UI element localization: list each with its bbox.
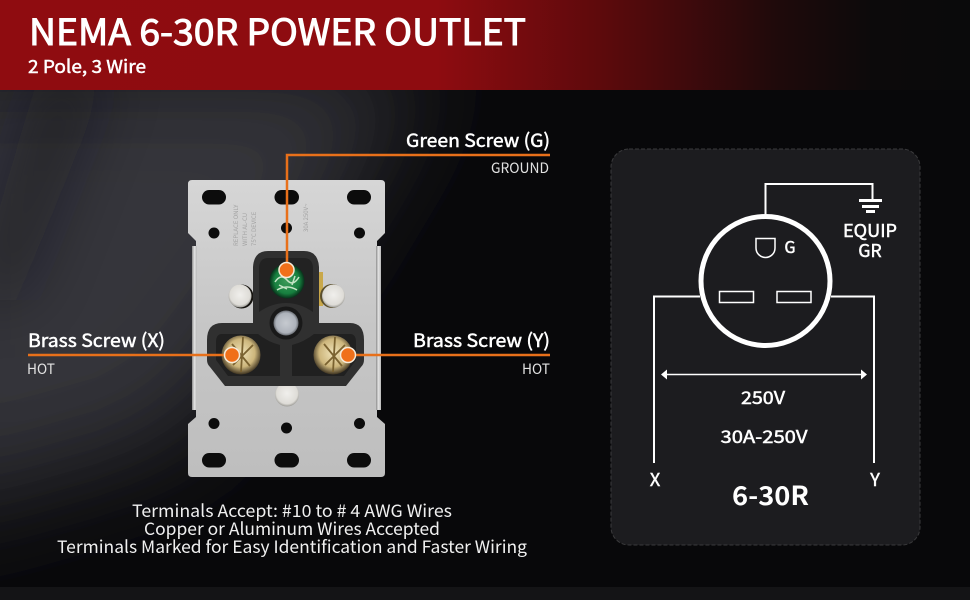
header banner <box>0 0 970 90</box>
callout: brass screw X: HOT <box>27 359 55 379</box>
outlet photo: back of receptacle <box>188 180 385 477</box>
panel: wiring diagram <box>611 149 920 545</box>
callout: brass screw Y: HOT <box>522 359 550 379</box>
terminals description text <box>57 497 527 558</box>
plate slots and holes <box>202 190 371 468</box>
ground wire <box>766 184 872 214</box>
subtitle: 2 Pole, 3 Wire <box>28 53 146 79</box>
gr label: GR <box>858 238 882 263</box>
brass screw right <box>314 336 352 374</box>
brass screw left <box>222 336 260 374</box>
voltage label: 250V <box>741 385 786 410</box>
plate fine print: 30A 250V~ <box>301 203 310 232</box>
ground pin <box>756 238 775 258</box>
callout: green screw <box>279 127 550 278</box>
plate fine print: 75°C DEVICE <box>249 211 258 246</box>
receptacle circle <box>701 216 830 346</box>
green ground screw <box>270 264 304 298</box>
arrow: 250V span <box>661 370 867 380</box>
hot wires <box>654 296 874 463</box>
x label: X <box>650 466 661 492</box>
callout: green screw: GROUND <box>491 158 549 178</box>
g label: G <box>784 234 796 258</box>
terminal body <box>207 251 364 386</box>
model label: 6-30R <box>732 476 809 513</box>
rating label: 30A-250V <box>720 424 809 449</box>
center steel screw <box>270 306 302 340</box>
bottom silver rivet <box>275 382 299 406</box>
side silver rivets <box>230 284 254 308</box>
callout: brass screw X <box>27 327 240 379</box>
plate fine print: REPLACE ONLY <box>231 204 240 246</box>
plate fine print <box>231 203 310 246</box>
equip gr label: EQUIP <box>843 218 897 243</box>
callout: brass screw Y: Brass Screw (Y) <box>413 327 550 353</box>
mounting plate <box>188 180 385 477</box>
icon: ground symbol <box>859 199 882 213</box>
callout: brass screw X: Brass Screw (X) <box>28 327 165 353</box>
y label: Y <box>869 466 880 492</box>
terminals description text: Copper or Aluminum Wires Accepted <box>144 515 440 540</box>
title: NEMA 6-30R POWER OUTLET <box>29 4 526 56</box>
terminals description text: Terminals Accept: #10 to # 4 AWG Wires <box>132 497 452 522</box>
callout: green screw: Green Screw (G) <box>406 127 550 153</box>
hot slots <box>720 292 811 302</box>
callout: brass screw Y <box>340 327 550 379</box>
terminals description text: Terminals Marked for Easy Identification and Faster Wiring <box>57 533 527 558</box>
plate fine print: WITH AL-CU <box>240 213 249 246</box>
